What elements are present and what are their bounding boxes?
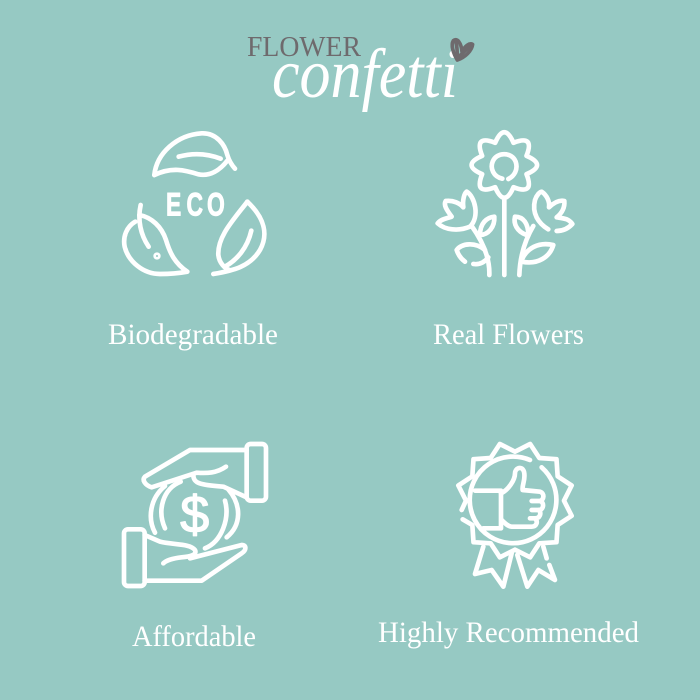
- icon: hands and coin: [124, 444, 266, 586]
- label: Highly Recommended: Highly Recommended: [378, 616, 639, 649]
- label: Biodegradable: Biodegradable: [108, 318, 278, 351]
- coin: [151, 482, 238, 548]
- thumbs up: [475, 468, 543, 528]
- center flower: [472, 132, 537, 198]
- label: Affordable: Affordable: [132, 620, 256, 653]
- panel: biodegradable: [108, 133, 278, 351]
- panel: affordable: [124, 444, 266, 653]
- logo word: confetti: confetti: [272, 36, 458, 113]
- ribbons: [475, 547, 555, 587]
- icon: flowers: [438, 132, 572, 275]
- icon: heart: [452, 40, 473, 60]
- icon text: ECO: ECO: [166, 186, 225, 223]
- rosette edge: [458, 444, 572, 557]
- panel: highly recommended: [378, 444, 639, 649]
- top leaf: [154, 133, 235, 175]
- icon: eco leaves: [124, 133, 264, 274]
- right leaf: [213, 202, 264, 274]
- inner ring: [470, 457, 556, 543]
- panel: real flowers: [433, 132, 584, 351]
- logo word: FLOWER: FLOWER: [247, 31, 362, 63]
- label: Real Flowers: Real Flowers: [433, 318, 584, 351]
- logo: [247, 31, 473, 113]
- top hand: [144, 444, 266, 501]
- coin: $: [180, 486, 209, 544]
- left leaf: [124, 205, 187, 274]
- left tulip: [438, 192, 476, 230]
- icon: award rosette with thumbs up: [458, 444, 572, 587]
- bottom hand: [124, 529, 245, 586]
- right tulip: [534, 192, 572, 231]
